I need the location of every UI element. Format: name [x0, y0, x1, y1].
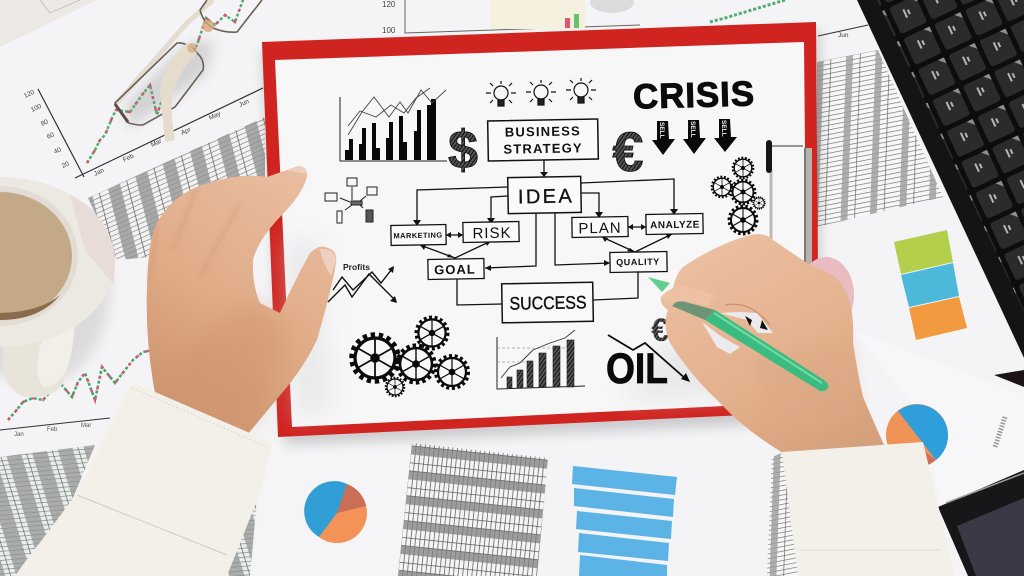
right hand [661, 234, 885, 453]
left shirt cuff [15, 382, 273, 576]
arrow heads [413, 172, 678, 271]
paper gap above pen [720, 312, 773, 333]
spreadsheet: top right [817, 50, 943, 227]
chart month labels [14, 423, 91, 438]
oil label: OIL [606, 345, 668, 393]
gears: top right [712, 158, 765, 234]
knuckle creases [150, 187, 240, 280]
paper: top left chart sheet: Jun [238, 98, 251, 109]
paper: top left chart sheet: 20 [61, 160, 71, 170]
stacked bar: blue [901, 263, 959, 307]
left hand [147, 166, 336, 435]
clipboard paper [275, 42, 806, 427]
lower paper shadow [620, 330, 740, 400]
phone [938, 470, 1024, 576]
paper: top left chart sheet [23, 0, 263, 178]
chart month labels: Mar [81, 423, 91, 429]
paper: top left chart sheet: 100 [30, 103, 43, 114]
paper: bottom pie sheet [250, 443, 412, 576]
light bulbs [486, 78, 596, 106]
spreadsheet: bottom centre [398, 443, 548, 576]
gears: bottom left [352, 317, 468, 396]
glasses shadow [125, 40, 215, 128]
right shirt cuff [782, 442, 955, 576]
wrist tone [750, 340, 860, 440]
profits chart [328, 262, 397, 303]
clipboard shadow [262, 30, 820, 445]
sell arrows [652, 119, 737, 155]
paper: top left chart sheet: Mar [150, 137, 164, 149]
candlestick chart: bottom left [0, 350, 153, 430]
paper: top left chart sheet: 40 [53, 146, 63, 156]
sell arrows: SELL [689, 121, 696, 138]
lower hand shading [165, 300, 290, 425]
paper: top left chart sheet: May [208, 110, 223, 122]
paper: top left chart sheet: Apr [180, 126, 193, 137]
bar and line chart [340, 88, 447, 161]
box: risk: RISK [472, 225, 512, 242]
glasses [115, 0, 262, 142]
connector lines [417, 160, 674, 305]
sketch marks in gap [745, 316, 768, 330]
euro sign: € [612, 120, 644, 183]
paper: top left chart sheet: Feb [122, 153, 135, 164]
paper: top left corner sheet [0, 0, 97, 47]
stacked bar: green [894, 230, 953, 274]
box: goal [428, 259, 484, 279]
finger crease [725, 304, 770, 325]
paper: top centre sheet: Jun [838, 32, 849, 39]
box: analyze [646, 214, 703, 235]
box: idea [508, 176, 581, 214]
box: plan [572, 217, 628, 237]
pie chart: bottom [304, 481, 367, 543]
euro behind hand: € [651, 312, 669, 348]
thumbnail left [320, 249, 336, 276]
spreadsheet: top left [88, 117, 265, 260]
box: idea: IDEA [518, 185, 574, 208]
coffee mug [0, 177, 115, 398]
stacked bar: orange [909, 297, 967, 340]
box: risk [463, 222, 519, 242]
crisis heading: CRISIS [633, 74, 756, 117]
box: success: SUCCESS [509, 292, 587, 314]
paper: top left chart sheet: Jan [93, 167, 106, 178]
pink pie behind right hand [798, 257, 854, 333]
paper: top left chart sheet: 120 [23, 89, 36, 100]
paper: lower right sheet [853, 330, 1024, 507]
chart month labels: Jan [14, 432, 24, 438]
paper: top centre sheet [382, 0, 868, 39]
coffee mug shadow [0, 195, 110, 385]
sell arrows: SELL [658, 122, 665, 139]
box: marketing [391, 225, 446, 245]
horizontal bar chart: blue [572, 466, 677, 576]
fingernail top [286, 166, 306, 174]
clipboard clip [769, 143, 808, 268]
small legend numbers [995, 417, 1005, 447]
growth bar chart [497, 330, 585, 389]
green pen [672, 300, 828, 391]
paper soft shadow [285, 240, 330, 420]
box: quality [610, 251, 667, 272]
box: goal: GOAL [434, 262, 476, 277]
box: business strategy: BUSINESS [505, 123, 581, 140]
profits chart: Profits [343, 262, 370, 272]
green pen tip [648, 277, 670, 292]
box: analyze: ANALYZE [650, 220, 700, 231]
paper gap below pen [702, 322, 740, 354]
box: business strategy: STRATEGY [503, 140, 583, 157]
spreadsheet: bottom right [767, 445, 805, 576]
red clipboard [262, 22, 818, 437]
dark wedge [994, 370, 1024, 387]
index finger over pen [661, 286, 715, 306]
paper: top left chart sheet: 80 [40, 118, 50, 128]
dollar sign: $ [448, 120, 478, 180]
oil falling arrow [608, 335, 690, 382]
paper: top centre sheet: 120 [382, 0, 396, 9]
paper: top left chart sheet: 60 [46, 131, 56, 141]
box: quality: QUALITY [616, 257, 660, 267]
chart month labels: Feb [47, 427, 58, 433]
sell arrows: SELL [720, 120, 727, 137]
box: success [502, 282, 593, 323]
box: business strategy [488, 119, 598, 161]
box: plan: PLAN [578, 220, 622, 237]
box: marketing: MARKETING [393, 231, 443, 240]
spreadsheet: bottom left [0, 445, 95, 576]
keyboard [857, 0, 1024, 358]
spreadsheet: bottom left under cuff [218, 487, 258, 576]
network icons [325, 178, 377, 223]
paper: top centre sheet: 100 [382, 26, 396, 35]
pie chart: right [886, 404, 948, 466]
